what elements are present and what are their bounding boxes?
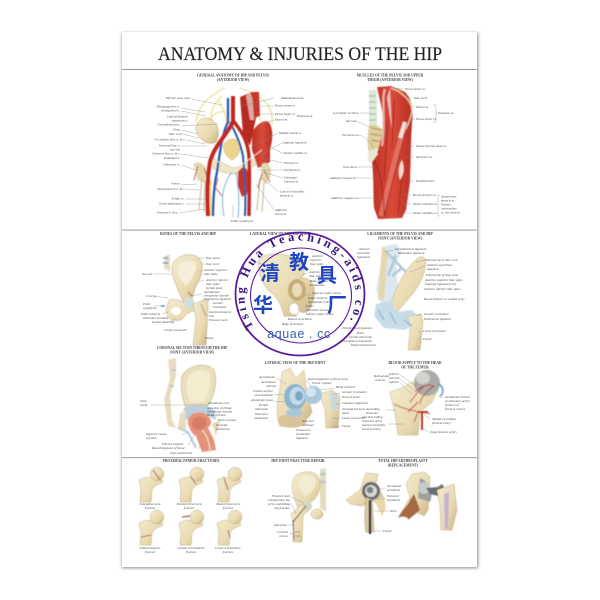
labels: lateral hip joint left: Lunate surface bbox=[252, 389, 274, 393]
labels: blood supply: Retinacular bbox=[373, 374, 390, 378]
labels: bones: Intertrochanteric bbox=[208, 310, 232, 314]
labels: anatomy left: Ilium bbox=[172, 128, 181, 132]
labels: anatomy right: internus m. bbox=[284, 180, 299, 184]
labels: blood supply: inferior bbox=[389, 380, 400, 384]
labels: ligaments: Iliofemoral ligament bbox=[423, 317, 451, 321]
labels: blood supply: of obturator artery bbox=[445, 399, 470, 403]
labels: lateral view: Acetabulum bbox=[308, 283, 325, 287]
labels: coronal section: Articular cartilage bbox=[206, 406, 232, 410]
labels: muscles bbox=[329, 87, 460, 215]
heading: muscles: MUSCLES OF THE PELVIS AND UPPER bbox=[357, 74, 424, 78]
labels: muscles: intermedius bbox=[441, 206, 457, 210]
labels: fracture repair: Cortical bbox=[277, 530, 288, 534]
labels: ligaments: ligament bbox=[427, 267, 439, 271]
labels: anatomy right: Adductor bbox=[274, 208, 288, 212]
labels: lateral hip joint bbox=[296, 377, 369, 440]
labels: blood supply: branches bbox=[366, 411, 379, 415]
labels: anatomy right: Iliacus m. bbox=[274, 118, 288, 122]
panel: blood supply to the head of the femur bbox=[362, 361, 470, 435]
labels: ligaments left: Ischial tuberosity bbox=[348, 335, 373, 339]
labels: bones: iliac spine bbox=[204, 272, 218, 276]
heading: coronal section: JOINT (ANTERIOR VIEW) bbox=[170, 350, 215, 354]
labels: bones: Ischial spine bbox=[205, 286, 223, 290]
labels: bones: Acetabular labrum bbox=[203, 294, 230, 298]
labels: arthroplasty bbox=[382, 484, 402, 533]
labels: anatomy right: Psoas minor m. bbox=[274, 104, 296, 108]
labels: fracture captions: fracture bbox=[223, 506, 234, 510]
labels: lateral hip joint: Head of femur bbox=[335, 385, 356, 389]
labels: muscles: Vastus lateralis m. bbox=[413, 202, 437, 206]
labels: muscles: Rectus femoris m. bbox=[412, 193, 437, 197]
labels: anatomy left: Ilioinguinal n. bbox=[160, 108, 180, 112]
labels: bones: Greater bbox=[213, 301, 224, 305]
labels: fracture captions: Subtrochanteric bbox=[139, 546, 161, 550]
labels: lateral hip joint: Transverse bbox=[296, 428, 311, 432]
labels: bones: Coccyx bbox=[146, 294, 156, 298]
labels: coronal section: Head of femur bbox=[206, 413, 227, 417]
labels: bones: Iliac crest bbox=[205, 262, 219, 266]
labels: ligaments: Iliolumbar ligament bbox=[397, 251, 425, 255]
labels: ligaments: Internal lip of iliac crest bbox=[425, 273, 458, 277]
leader lines bbox=[354, 88, 440, 216]
stamp blue marks: 清 bbox=[260, 262, 280, 285]
labels: muscles: Adductor longus m. bbox=[329, 176, 356, 180]
heading: coronal section: CORONAL SECTION THROUGH THE HIP bbox=[157, 346, 228, 350]
labels: lateral view: Ramus of ischium bbox=[287, 317, 312, 321]
labels: coronal section: membrane bbox=[216, 427, 230, 431]
labels: ligaments: Greater trochanter bbox=[424, 312, 450, 316]
labels: ligaments left: sacroiliac bbox=[357, 251, 371, 255]
labels: ligaments left bbox=[341, 247, 376, 347]
labels: anatomy right: brevis m. bbox=[275, 212, 287, 216]
labels: arthroplasty: Femoral bbox=[386, 494, 398, 498]
labels: blood supply: femoral artery) bbox=[445, 407, 465, 411]
labels: anatomy left: Deep femoral a. & v. bbox=[156, 187, 185, 191]
heading: bones: BONES OF THE PELVIS AND HIP bbox=[160, 232, 217, 236]
poster sheet bbox=[122, 32, 477, 567]
labels: blood supply: and descending bbox=[362, 415, 383, 419]
labels: lateral hip joint: Lesser trochanter bbox=[341, 416, 366, 420]
stamp blue marks: 厂 bbox=[327, 295, 347, 317]
labels: ligaments: Lesser trochanter bbox=[422, 329, 447, 333]
stamp blue marks: 具 bbox=[317, 265, 337, 287]
labels: anatomy left: Great saphenous v. bbox=[159, 202, 184, 206]
leader lines bbox=[384, 250, 425, 339]
labels: ligaments: Anterior superior iliac spine bbox=[424, 278, 463, 282]
labels: fracture captions: Subcapital neck bbox=[140, 502, 161, 506]
labels: lateral view: iliac spine bbox=[310, 262, 324, 266]
title: ANATOMY & INJURIES OF THE HIP bbox=[158, 45, 442, 65]
heading: general anatomy: (ANTERIOR VIEW) bbox=[217, 78, 250, 82]
labels: blood supply: Medial circumflex bbox=[431, 417, 456, 421]
labels: anatomy left: Lateral femoral bbox=[166, 114, 188, 118]
illustration: hip joint bbox=[277, 368, 340, 428]
labels: blood supply: arteries bbox=[375, 378, 386, 382]
labels: muscles: L4 lumbar vertebra bbox=[332, 111, 359, 115]
labels: anatomy left: External iliac v. bbox=[158, 144, 180, 148]
panel: proximal femur fractures bbox=[139, 459, 242, 554]
labels: ligaments: Anterior inferior iliac spine bbox=[423, 287, 461, 291]
labels: anatomy left: Circumflex iliac a. & v. bbox=[154, 138, 185, 142]
labels: ligaments left: Iliopectineal bursa bbox=[350, 343, 376, 347]
labels: lateral hip joint: Neck of femur bbox=[341, 395, 361, 399]
stamp blue marks bbox=[253, 251, 347, 317]
labels: fracture captions: Greater trochanteric bbox=[177, 546, 205, 550]
labels: lateral hip joint left: tuberosity bbox=[255, 407, 269, 411]
leader lines bbox=[257, 257, 310, 296]
labels: anatomy right: Psoas major m. bbox=[274, 112, 296, 116]
panel: bones of the pelvis and hip bbox=[140, 232, 232, 345]
illustration: transcervical neck fracture bbox=[179, 467, 204, 502]
labels: anatomy left bbox=[151, 96, 190, 214]
leader lines bbox=[151, 405, 208, 449]
labels: fracture captions: fracture bbox=[184, 506, 195, 510]
labels: anatomy right: Femoral n. bbox=[283, 161, 299, 165]
labels: coronal section: cavity bbox=[140, 403, 148, 407]
labels: lateral hip joint: Femur capsule bbox=[311, 381, 332, 385]
labels: bones: Pubic tubercle bbox=[140, 312, 161, 316]
panel: lateral view of the hip bone bbox=[250, 232, 341, 326]
labels: lateral hip joint left bbox=[250, 375, 277, 420]
illustration: basicervical fracture bbox=[217, 467, 242, 502]
labels: blood supply: Ascending bbox=[365, 407, 380, 411]
heading: lateral hip joint: LATERAL VIEW OF THE HIP JOINT bbox=[265, 361, 326, 365]
labels: bones: Pubic bbox=[142, 302, 151, 306]
labels: lateral view: Pubis bbox=[305, 304, 314, 308]
panel: general anatomy of hip and pelvis bbox=[151, 74, 313, 223]
labels: anatomy left: Femur bbox=[170, 182, 181, 186]
labels: ligaments: Sacrotuberous ligament bbox=[395, 247, 426, 251]
heading: arthroplasty: (REPLACEMENT) bbox=[388, 464, 419, 468]
labels: ligaments: Inguinal ligament (cut) bbox=[424, 282, 456, 286]
heading: arthroplasty: TOTAL HIP ARTHROPLASTY bbox=[378, 459, 428, 463]
labels: fracture captions: Lesser trochanteric bbox=[214, 546, 241, 550]
labels: lateral hip joint: ligament bbox=[296, 436, 308, 440]
labels: ligaments left: Anterior bbox=[358, 247, 371, 251]
labels: lateral view: Obturator foramen bbox=[306, 308, 332, 312]
labels: lateral view: iliac spine bbox=[309, 274, 323, 278]
labels: lateral hip joint left: Obturator bbox=[255, 412, 269, 416]
labels: muscles: Psoas major m. bbox=[415, 117, 437, 121]
heading: general anatomy: GENERAL ANATOMY OF HIP AND PELVIS bbox=[197, 74, 269, 78]
labels: muscles: Psoas minor m. bbox=[404, 87, 426, 91]
labels: anatomy right: Lateral circumflex bbox=[279, 190, 305, 194]
illustration: thigh muscles bbox=[368, 86, 413, 219]
labels: anatomy right: Abdominal aorta bbox=[280, 96, 304, 100]
labels: muscles: Iliopsoas m. bbox=[437, 111, 454, 115]
labels: anatomy right: Pectineus m. bbox=[283, 168, 301, 172]
labels: ligaments left: ligaments bbox=[357, 255, 371, 259]
labels: fracture repair: Compression hip bbox=[268, 498, 290, 502]
labels: lateral view: Inferior pubic ramus bbox=[305, 312, 334, 316]
stamp blue marks: 华 bbox=[253, 294, 273, 317]
illustration: fracture repair bbox=[291, 468, 326, 542]
labels: ligaments left: Pubofemoral ligament bbox=[341, 326, 372, 330]
labels: fracture repair: hip fracture bbox=[274, 506, 291, 510]
labels: fracture captions: fracture bbox=[186, 550, 197, 554]
labels: lateral hip joint left: labrum bbox=[266, 384, 277, 388]
labels: muscles: Vastus medialis m. bbox=[413, 211, 438, 215]
panel: ligaments of the pelvis and hip joint bbox=[341, 232, 464, 350]
labels: fracture repair: screw stabilizing bbox=[268, 502, 290, 506]
illustration: subtrochanteric fracture bbox=[139, 510, 164, 545]
labels: muscles: Iliacus m. bbox=[415, 105, 429, 109]
labels: muscles: (Vastus bbox=[441, 202, 451, 206]
labels: anatomy left: Genitofemoral n. bbox=[157, 122, 180, 126]
labels: anatomy right: Pubic symphysis bbox=[230, 219, 254, 223]
labels: lateral hip joint: Capsular ligaments bbox=[342, 401, 369, 405]
illustration: ligaments bbox=[374, 244, 426, 350]
illustration: implant components bbox=[398, 472, 457, 530]
panel: coronal section through the hip joint bbox=[140, 346, 237, 455]
labels: anatomy left: Obturator n. bbox=[163, 162, 180, 166]
illustration: implant in pelvis bbox=[346, 473, 386, 534]
labels: fracture repair: Side plate bbox=[274, 523, 288, 527]
labels: fracture repair bbox=[268, 494, 291, 538]
labels: fracture captions bbox=[139, 502, 241, 554]
labels: anatomy left: Iliac crest bbox=[168, 132, 182, 136]
labels: anatomy right: femoral a. bbox=[280, 194, 294, 198]
labels: ligaments: Anterior sacroiliac bbox=[426, 263, 453, 267]
illustration: coronal section bbox=[164, 358, 220, 452]
labels: muscles: Adductor magnus m. bbox=[330, 196, 359, 200]
labels: lateral hip joint left: Acetabulum bbox=[258, 375, 276, 379]
labels: bones bbox=[140, 256, 232, 340]
labels: blood supply: Deep femoral artery bbox=[429, 430, 457, 434]
labels: arthroplasty: Femur bbox=[382, 529, 393, 533]
labels: fracture captions: fracture bbox=[223, 550, 234, 554]
labels: bones: iliac spine bbox=[206, 282, 220, 286]
panel: total hip arthroplasty bbox=[346, 459, 457, 534]
labels: muscles: Iliotibial tract bbox=[415, 179, 435, 183]
labels: coronal section: Acetabular labrum bbox=[206, 410, 233, 414]
labels: bones: Femoral neck bbox=[208, 318, 228, 322]
labels: arthroplasty: prosthesis bbox=[386, 498, 401, 502]
labels: bones: symphysis bbox=[143, 306, 157, 310]
labels: lateral view: Body of ilium bbox=[310, 279, 328, 283]
leader lines bbox=[288, 497, 304, 534]
leader lines bbox=[274, 378, 340, 427]
labels: fracture captions: fracture bbox=[145, 550, 156, 554]
labels: coronal section: Neck of femur bbox=[217, 418, 237, 422]
labels: blood supply: anterior bbox=[389, 376, 401, 380]
leader lines bbox=[179, 98, 283, 218]
labels: coronal section: of pubis bbox=[146, 436, 157, 440]
labels: lateral view bbox=[282, 254, 341, 326]
labels: ligaments bbox=[395, 247, 464, 341]
labels: coronal section: Zona orbicularis bbox=[170, 451, 193, 455]
labels: anatomy left: External iliac a. & v. bbox=[151, 152, 180, 156]
labels: muscles: m. not shown) bbox=[441, 210, 460, 214]
poster shadow bbox=[122, 33, 478, 568]
labels: bones: Anterior inferior bbox=[205, 278, 229, 282]
labels: anatomy left: Inferior vena cava bbox=[165, 96, 190, 100]
labels: fracture repair: screws bbox=[279, 534, 289, 538]
leader lines bbox=[372, 489, 389, 531]
labels: anatomy left: Pudendal n. bbox=[163, 156, 180, 160]
labels: lateral hip joint: Femur bbox=[341, 424, 352, 428]
labels: bones: trochanter bbox=[213, 305, 228, 309]
labels: anatomy left: Sciatic n. bbox=[172, 196, 184, 200]
labels: muscles: femoris m. bbox=[441, 198, 455, 202]
labels: lateral hip joint left: Acetabular fossa bbox=[250, 398, 273, 402]
labels: ligaments: Femur bbox=[422, 337, 433, 341]
labels: anatomy left: Femoral v. & a. bbox=[156, 210, 178, 214]
stamp: Tsing Hua Teaching-aids co.: Tsing Hua Teaching-aids co. bbox=[238, 232, 362, 332]
labels: bones: line bbox=[209, 314, 214, 318]
illustration: greater trochanteric fracture bbox=[179, 510, 204, 545]
labels: arthroplasty: Acetabular bbox=[386, 484, 402, 488]
labels: bones: Sacrum bbox=[142, 272, 153, 276]
labels: fracture captions: fracture bbox=[145, 506, 156, 510]
panel: lateral view of the hip joint bbox=[250, 361, 369, 440]
labels: anatomy right: Inguinal ligament bbox=[282, 140, 307, 144]
labels: lateral hip joint left: membrane bbox=[254, 416, 269, 420]
labels: lateral hip joint: Articular bbox=[301, 419, 315, 423]
labels: blood supply: (branch of bbox=[445, 403, 460, 407]
labels: coronal section: Fibrous capsule bbox=[161, 442, 184, 446]
labels: anatomy left: cutaneous n. bbox=[171, 118, 188, 122]
heading: femur fractures: PROXIMAL FEMUR FRACTURES bbox=[163, 459, 219, 463]
labels: bones: Iliofemoral ligament bbox=[203, 297, 231, 301]
labels: muscles: Quadriceps bbox=[441, 194, 457, 198]
labels: bones: Femur bbox=[204, 336, 215, 340]
labels: ligaments: External lip of iliac crest bbox=[424, 258, 458, 262]
labels: anatomy right: Median sacral a. bbox=[278, 131, 302, 135]
panel: muscles of the pelvis and upper thigh bbox=[329, 74, 460, 219]
labels: lateral hip joint: Greater trochanter bbox=[342, 390, 368, 394]
labels: fracture repair: Femoral neck bbox=[271, 494, 291, 498]
labels: coronal section: Superior ramus bbox=[146, 432, 167, 436]
labels: coronal section: Round ligament of femur bbox=[151, 446, 186, 450]
stamp site name: aquae . cc bbox=[267, 327, 331, 341]
stamp ring text bbox=[244, 240, 356, 327]
labels: lateral view: Anterior inferior bbox=[308, 270, 332, 274]
labels: ligaments: Rectus femoris m. tendon (cut) bbox=[423, 297, 464, 301]
labels: anatomy left: Iliohypogastric n. bbox=[156, 104, 180, 108]
labels: anatomy right: Obturator bbox=[284, 176, 298, 180]
leader lines bbox=[153, 258, 204, 322]
labels: lateral hip joint: cartilage bbox=[302, 423, 314, 427]
illustration: lesser trochanteric fracture bbox=[217, 510, 242, 545]
labels: blood supply bbox=[362, 372, 470, 434]
illustration: femur with arteries bbox=[390, 370, 443, 435]
heading: blood supply: BLOOD SUPPLY TO THE HEAD bbox=[388, 361, 442, 365]
labels: fracture captions: Transcervical neck bbox=[176, 502, 202, 506]
labels: anatomy right bbox=[230, 96, 313, 223]
labels: lateral view: Body of ischium bbox=[282, 322, 304, 326]
labels: lateral hip joint: acetabular bbox=[296, 432, 311, 436]
labels: bones: Iliac fossa bbox=[205, 256, 220, 260]
labels: muscles: Pectineus m. bbox=[341, 133, 359, 137]
labels: coronal section: Joint bbox=[140, 399, 147, 403]
labels: muscles: Sartorius m. bbox=[416, 155, 432, 159]
illustration: pelvis with vessels and nerves bbox=[194, 88, 272, 218]
labels: lateral hip joint left: Acetabular bbox=[260, 380, 277, 384]
labels: muscles: Sacrum bbox=[346, 119, 357, 123]
labels: anatomy right: Gluteus medius m. bbox=[283, 151, 308, 155]
labels: lateral view: Superior pubic ramus bbox=[312, 291, 341, 295]
labels: coronal section: Acetabular roof bbox=[207, 401, 230, 405]
heading: ligaments: LIGAMENTS OF THE PELVIS AND HIP bbox=[367, 232, 434, 236]
labels: lateral view: superior bbox=[310, 258, 322, 262]
labels: blood supply: Acetabular branch bbox=[444, 395, 470, 399]
labels: blood supply: Inferior bbox=[388, 372, 400, 376]
labels: blood supply: lateral circumflex bbox=[362, 423, 386, 427]
stamp rings bbox=[236, 232, 364, 356]
heading: ligaments: JOINT (ANTERIOR VIEW) bbox=[378, 236, 423, 240]
labels: lateral hip joint: Synovial bursa in bbox=[342, 407, 365, 411]
heading: muscles: THIGH (ANTERIOR VIEW) bbox=[367, 78, 414, 82]
labels: lateral hip joint left: Ischial bbox=[258, 403, 268, 407]
labels: ligaments left: Pubofemoral ligament bbox=[341, 339, 372, 343]
stamp blue marks: 教 bbox=[289, 251, 309, 274]
labels: muscles: Tensor fasciae latae m. bbox=[416, 144, 447, 148]
labels: lateral hip joint left: of acetabulum bbox=[254, 393, 274, 397]
labels: lateral hip joint: Round ligament of femur (cut) bbox=[307, 377, 348, 381]
labels: lateral view: Pubic tubercle bbox=[307, 296, 328, 300]
labels: muscles: Iliac crest bbox=[413, 96, 427, 100]
illustration: lateral hip bone bbox=[259, 254, 314, 316]
heading: lateral view: LATERAL VIEW OF THE HIP BONE bbox=[250, 232, 311, 236]
labels: coronal section: Synovial bbox=[216, 423, 227, 427]
heading: fracture repair: HIP JOINT FRACTURE REPAIR bbox=[271, 459, 325, 463]
labels: blood supply: branches of the bbox=[362, 419, 383, 423]
labels: bones: Anterior superior bbox=[203, 268, 228, 272]
labels: lateral view: Anterior bbox=[311, 254, 324, 258]
labels: bones: Obturator foramen bbox=[143, 316, 169, 320]
labels: bones: Acetabulum bbox=[203, 290, 220, 294]
labels: fracture captions: Basicervical neck bbox=[216, 502, 240, 506]
heading: blood supply: OF THE FEMUR bbox=[401, 366, 429, 370]
labels: bones: Ischial tuberosity bbox=[151, 320, 175, 324]
panel: hip joint fracture repair bbox=[268, 459, 326, 542]
labels: anatomy right: Iliopsoas m. bbox=[296, 114, 313, 118]
labels: anatomy left: Sacrum bbox=[170, 148, 181, 152]
leader lines bbox=[386, 375, 443, 432]
labels: blood supply: femoral artery bbox=[432, 421, 452, 425]
illustration: subcapital neck fracture bbox=[139, 467, 164, 502]
labels: arthroplasty: Stem bbox=[390, 509, 397, 513]
labels: coronal section bbox=[140, 399, 237, 455]
labels: bones: Lesser trochanter bbox=[163, 328, 188, 332]
labels: blood supply: femoral artery bbox=[362, 427, 382, 431]
labels: lateral view: Acetabular notch bbox=[307, 300, 331, 304]
illustration: bones bbox=[161, 254, 208, 345]
labels: lateral hip joint: hand bbox=[342, 411, 349, 415]
labels: muscles: Gracilis m. bbox=[343, 165, 358, 169]
labels: ligaments left: Pubis bbox=[355, 331, 365, 335]
labels: arthroplasty: prosthesis bbox=[386, 488, 401, 492]
